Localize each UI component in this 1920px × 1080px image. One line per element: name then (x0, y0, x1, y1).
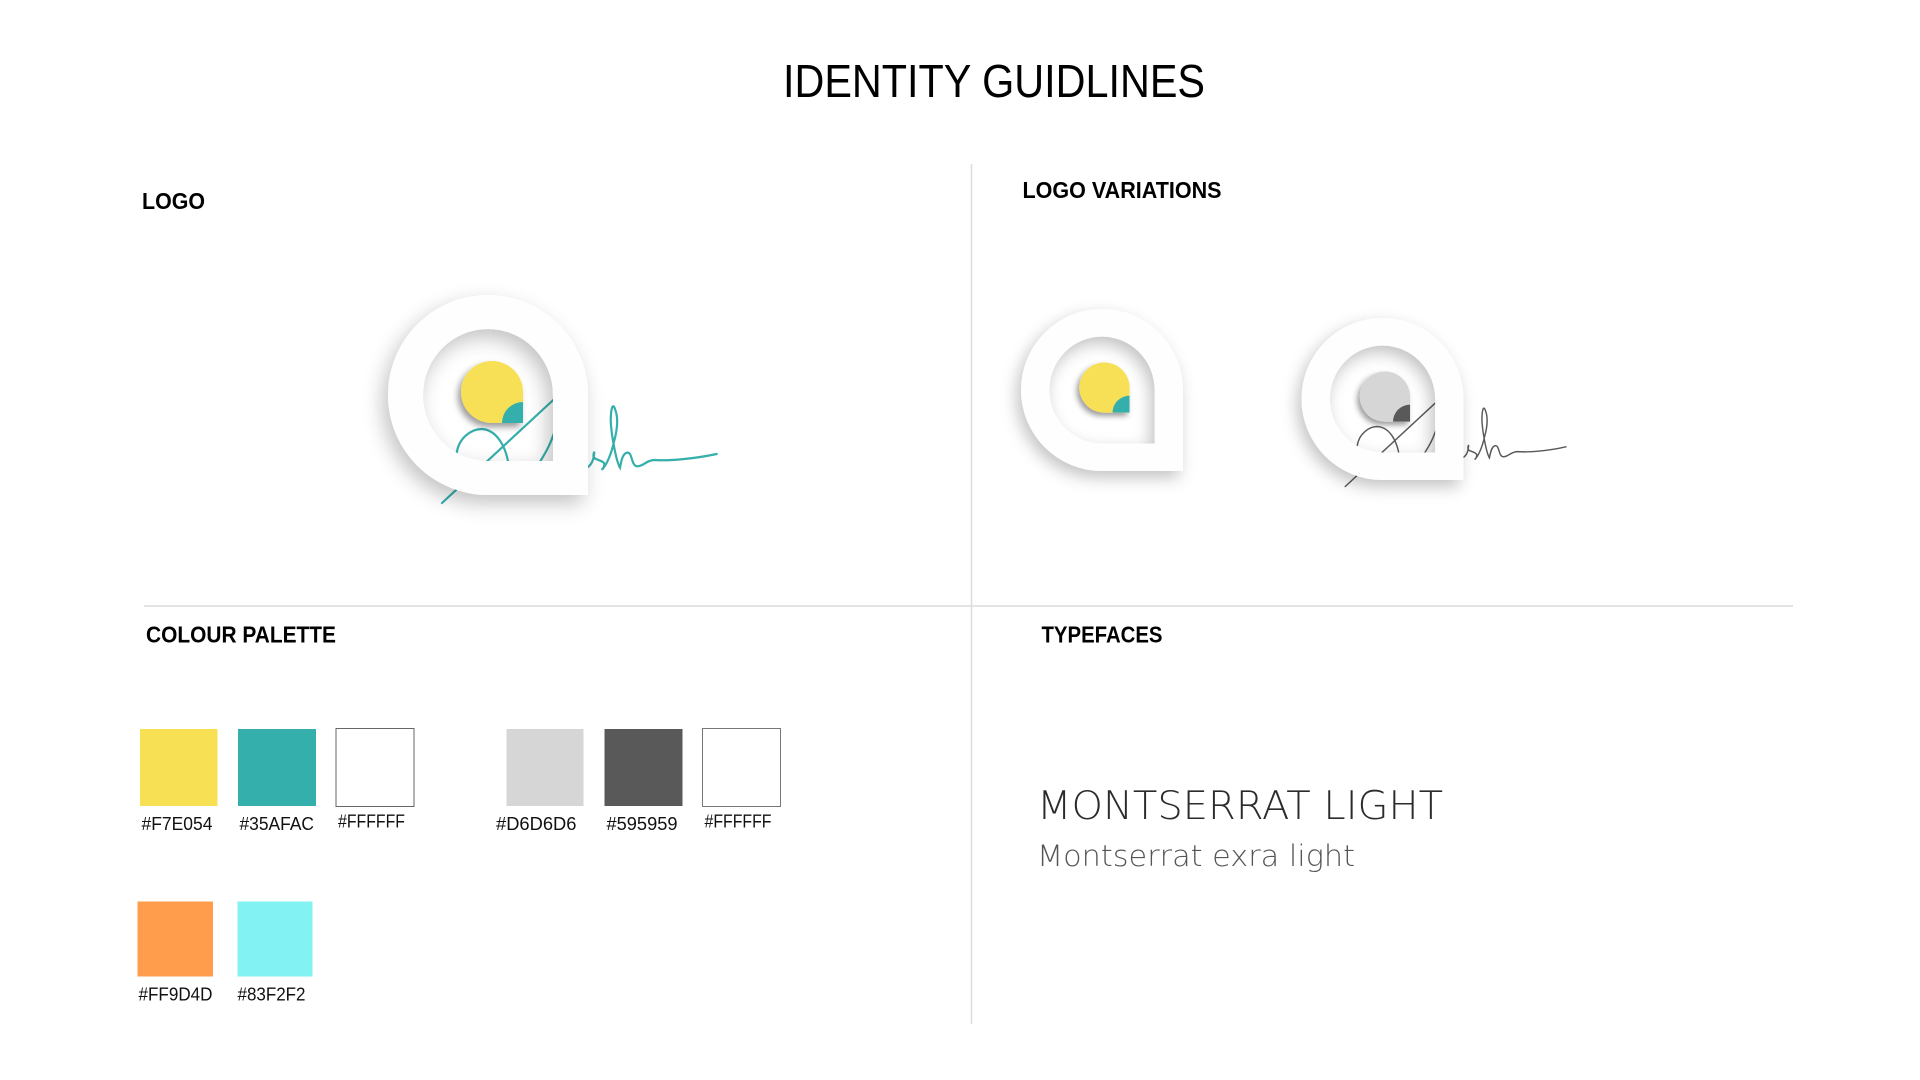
heading: logo variations: LOGO VARIATIONS (1022, 177, 1222, 203)
swatch: FFFFFF grey set (702, 728, 780, 832)
typeface sample: light: MONTSERRAT LIGHT (1037, 784, 1443, 829)
swatch: 35AFAC (238, 729, 316, 834)
heading: colour palette: COLOUR PALETTE (146, 622, 336, 648)
colour logo variation (1021, 309, 1183, 471)
swatch: FFFFFF grey set: #FFFFFF (704, 810, 772, 832)
heading: logo: LOGO (142, 188, 205, 214)
greyscale logo variation with signature (1302, 318, 1566, 486)
swatch: FFFFFF (336, 728, 414, 832)
logo dot (461, 361, 523, 423)
swatch: 83F2F2: #83F2F2 (238, 984, 306, 1004)
swatch: 35AFAC: #35AFAC (240, 813, 314, 834)
swatch: FF9D4D: #FF9D4D (138, 984, 212, 1004)
swatch: D6D6D6 (496, 729, 584, 834)
swatch: FF9D4D (138, 902, 213, 1004)
swatch: F7E054 (140, 729, 218, 834)
swatch: D6D6D6: #D6D6D6 (496, 813, 576, 834)
swatch: 595959: #595959 (606, 813, 678, 834)
main logo with teal signature (388, 295, 717, 503)
typeface sample: extra light: Montserrat exra light (1037, 839, 1355, 873)
title: IDENTITY GUIDLINES (783, 55, 1205, 107)
heading: typefaces: TYPEFACES (1042, 622, 1162, 648)
swatch: FFFFFF: #FFFFFF (338, 810, 405, 832)
logo ring (388, 295, 588, 495)
swatch: 83F2F2 (238, 902, 312, 1004)
swatch: 595959 (604, 729, 682, 834)
swatch: F7E054: #F7E054 (142, 813, 212, 834)
